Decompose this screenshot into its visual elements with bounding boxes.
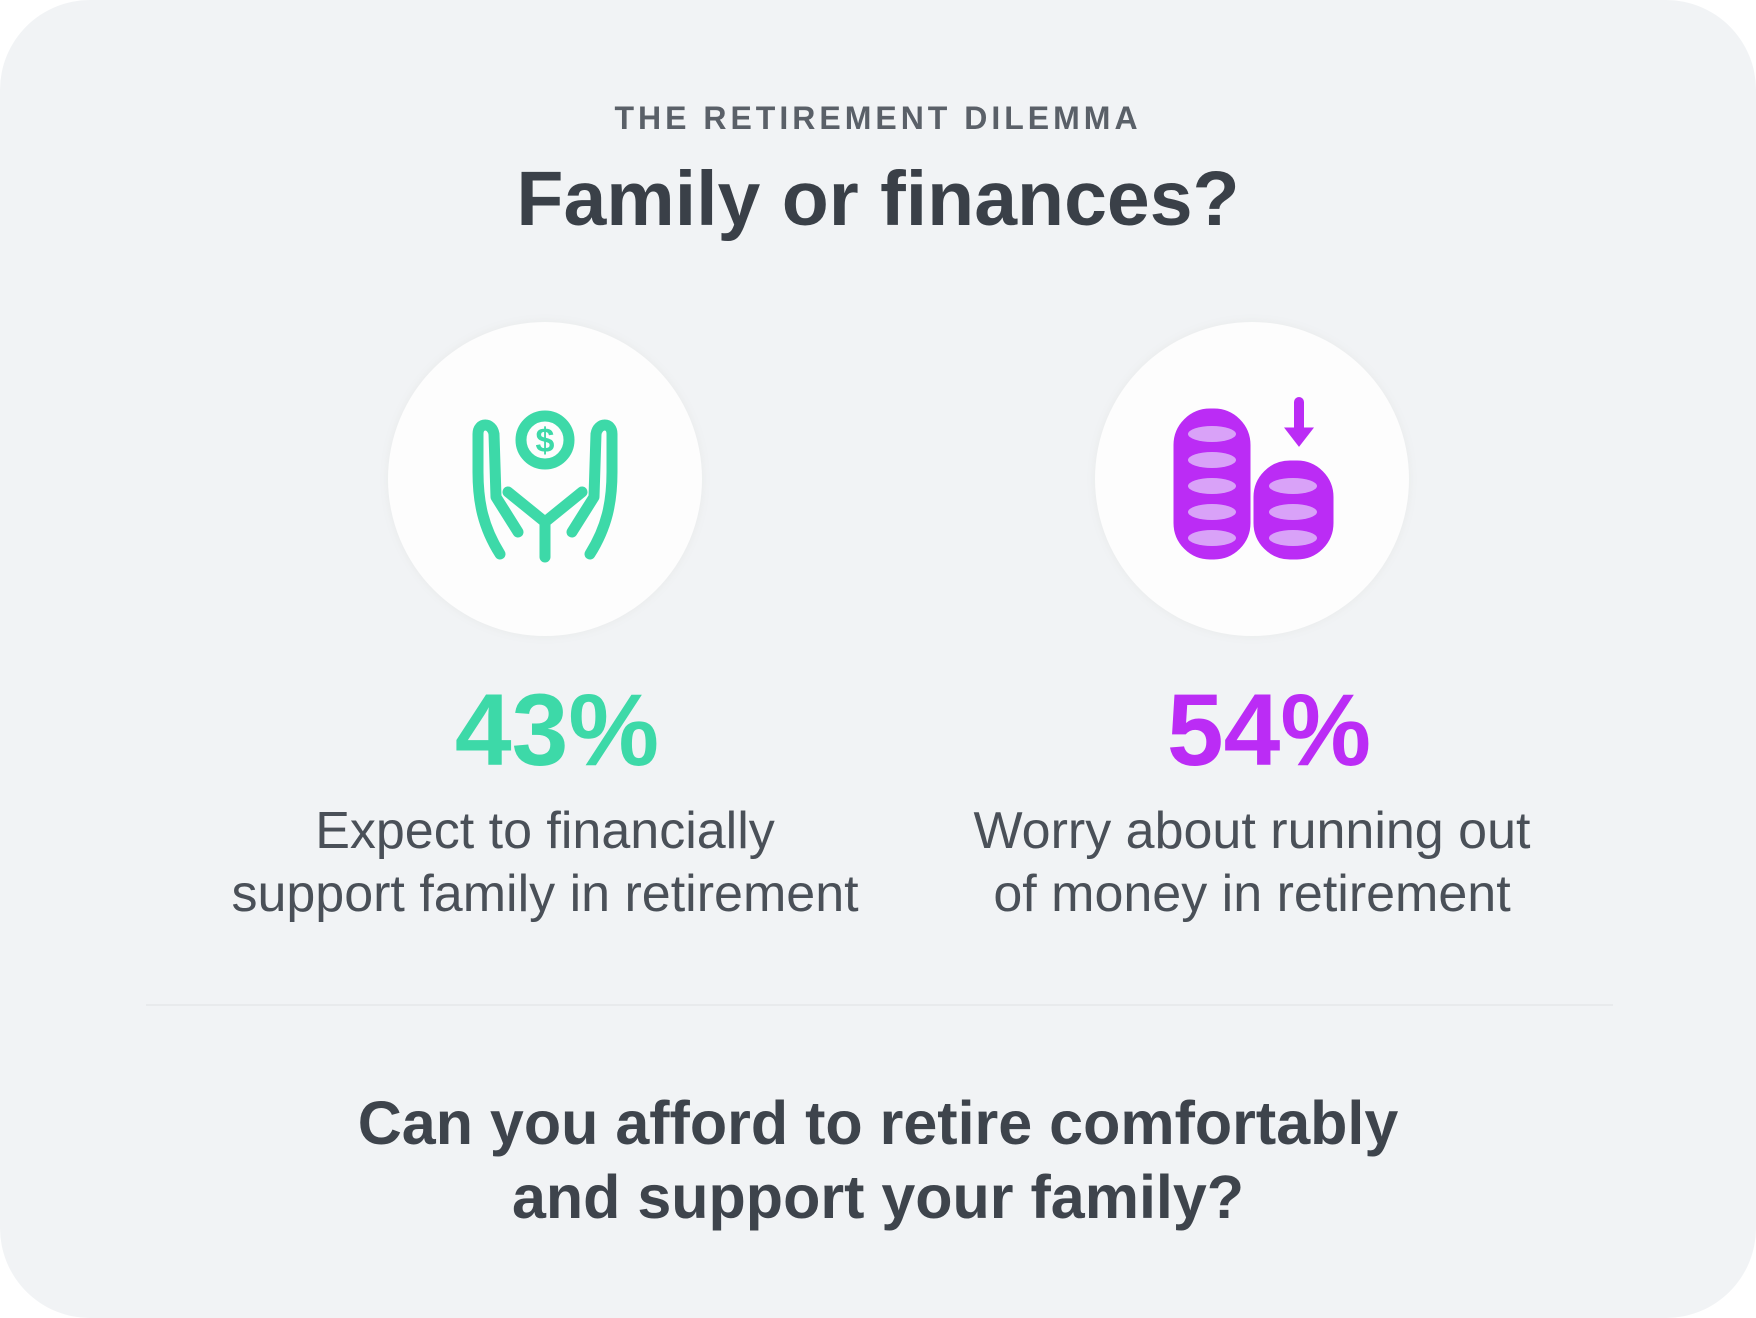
eyebrow heading: THE RETIREMENT DILEMMA (614, 100, 1142, 136)
description: of money in retirement (993, 865, 1511, 923)
panel: family support (231, 322, 859, 923)
icon: coin stacks with down arrow (1095, 322, 1409, 636)
description: Worry about running out (974, 802, 1530, 860)
title: Family or finances? (516, 156, 1240, 242)
stat: 54%: 54% (1167, 673, 1371, 787)
panel: money worry (974, 322, 1530, 923)
closing question: Can you afford to retire comfortably (358, 1089, 1398, 1157)
stat: 43%: 43% (455, 673, 659, 787)
description: support family in retirement (231, 865, 859, 923)
description (231, 802, 859, 923)
icon: hands holding dollar: $ (536, 422, 555, 460)
closing question (358, 1089, 1398, 1231)
icon: hands holding dollar (388, 322, 702, 636)
description (974, 802, 1530, 923)
closing question: and support your family? (512, 1163, 1244, 1231)
description: Expect to financially (315, 802, 775, 860)
